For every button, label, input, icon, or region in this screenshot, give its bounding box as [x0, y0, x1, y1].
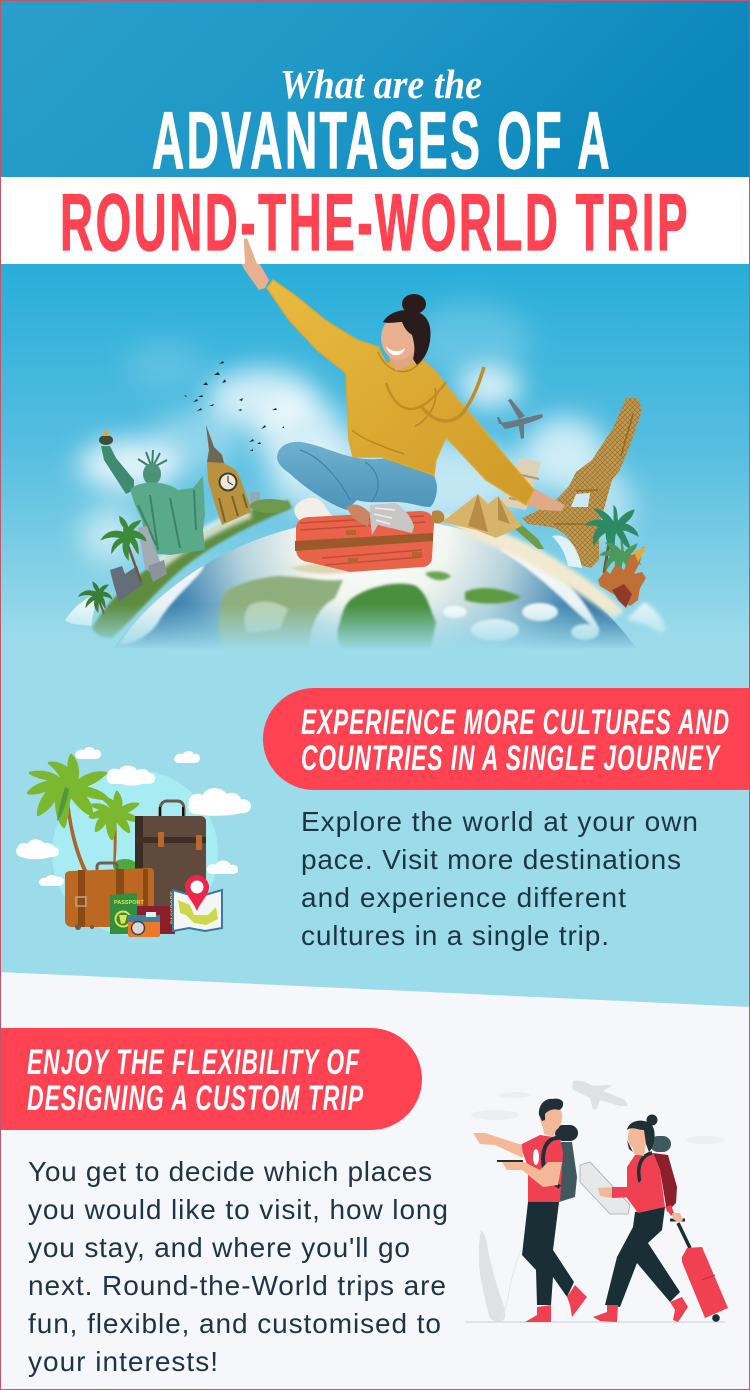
boots: [593, 1297, 688, 1322]
man: [473, 1099, 587, 1322]
arms: [473, 1133, 523, 1158]
text block 2: fun, flexible, and customised to: [28, 1308, 441, 1339]
panel: hero sky: [0, 264, 750, 664]
jeans: [277, 442, 437, 510]
head: [632, 1142, 646, 1156]
text block 2: you stay, and where you'll go: [28, 1232, 410, 1263]
faint clouds: [471, 1092, 725, 1144]
text block 2: your interests!: [28, 1346, 218, 1377]
airplane: [572, 1081, 628, 1110]
palm trees: [28, 755, 139, 873]
title: [60, 61, 690, 268]
torso: [627, 1153, 665, 1213]
orange suitcase: [65, 863, 154, 930]
text block 2: next. Round-the-World trips are: [28, 1270, 446, 1301]
person: woman on suitcase: [240, 238, 565, 572]
header band: [0, 0, 750, 178]
head: [542, 1122, 558, 1137]
heading pill 1: [263, 688, 750, 790]
plant: [479, 1230, 505, 1321]
text block 1: Explore the world at your own: [301, 806, 698, 837]
arm: [612, 1170, 657, 1198]
green passport: [110, 893, 144, 934]
woman: [580, 1114, 728, 1322]
landmark: Big Ben: [206, 425, 290, 525]
heading pill 2: [0, 1028, 422, 1130]
drawstring: [386, 382, 446, 409]
text block 1: cultures in a single trip.: [301, 920, 609, 951]
text block 2: You get to decide which places: [28, 1156, 432, 1187]
map: [173, 890, 222, 931]
shoe right: [370, 503, 414, 535]
hand right: [527, 489, 565, 511]
shoe left: [294, 498, 332, 522]
landmark: city and palms left: [79, 517, 167, 614]
title line: script: What are the: [280, 61, 482, 107]
clouds: [78, 302, 633, 563]
icon: airplane: [497, 399, 543, 439]
title band: [0, 177, 750, 264]
panel: section 1: [16, 688, 750, 951]
landmark: Eiffel tower: [522, 398, 642, 568]
birds: [184, 361, 284, 451]
pants: [522, 1202, 574, 1305]
hair: [383, 310, 431, 365]
pants: [605, 1207, 680, 1307]
map: [580, 1162, 630, 1214]
landmark: Statue of Liberty: [99, 429, 205, 555]
icon: location pin: [185, 875, 209, 911]
camera: [128, 912, 160, 937]
red passport: [133, 891, 177, 934]
strap: [639, 1153, 652, 1182]
land ridge around globe: [65, 500, 666, 638]
panel: section 2: [0, 1028, 728, 1377]
icon: luggage illustration: [16, 747, 251, 937]
hand: [240, 238, 269, 290]
green passport: PASSPORT: [114, 900, 144, 906]
ground: [465, 1321, 725, 1323]
red passport: PASSPORT: [171, 891, 177, 924]
text block 1: and experience different: [301, 882, 626, 913]
pack: [555, 1125, 578, 1141]
text block 2: you would like to visit, how long: [28, 1194, 448, 1225]
clouds: [16, 747, 251, 886]
suitcase: [295, 510, 444, 572]
neck and face: [386, 345, 418, 371]
pack: [650, 1136, 671, 1152]
landmark: palms and Kremlin right: [586, 506, 647, 608]
boots: [525, 1285, 587, 1322]
section 2 background: [0, 972, 750, 1390]
brown suitcase: [135, 801, 206, 913]
ankle: [346, 505, 370, 527]
text block 1: [301, 806, 698, 951]
landmark: pyramids and Pisa: [442, 458, 541, 538]
globe: [116, 523, 634, 648]
straps: [543, 1138, 560, 1187]
text block 2: [28, 1156, 448, 1377]
torso: [520, 1135, 563, 1202]
heading pill 2: DESIGNING A CUSTOM TRIP: [27, 1079, 364, 1118]
suitcase: [670, 1220, 728, 1322]
sweater: [267, 280, 534, 505]
text block 1: pace. Visit more destinations: [301, 844, 681, 875]
fade at globe bottom: [0, 605, 750, 665]
icon: travellers illustration: [465, 1081, 728, 1322]
heading pill 2: ENJOY THE FLEXIBILITY OF: [27, 1043, 360, 1082]
hand overlapping band: [244, 238, 257, 264]
